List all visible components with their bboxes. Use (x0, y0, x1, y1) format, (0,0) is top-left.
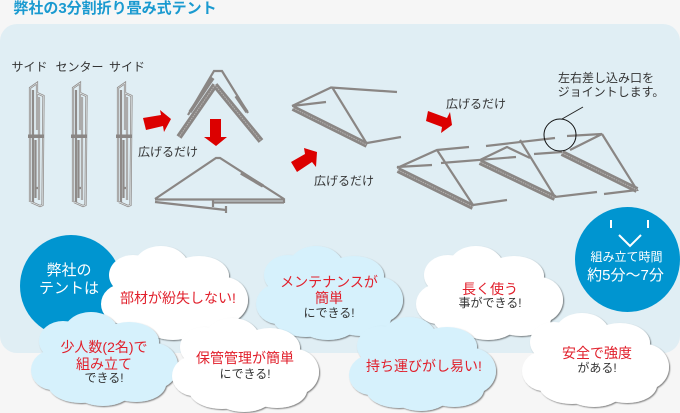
tent stage: fully open (397, 134, 637, 207)
label: spread 3: 広げるだけ (446, 97, 506, 111)
title: 弊社の3分割折り畳み式テント (13, 0, 217, 17)
folded tent: side (28, 83, 44, 206)
labels: side center side: サイド (11, 60, 48, 74)
cloud: long use (416, 246, 563, 340)
folded tent: side 2 (116, 83, 132, 206)
cloud: easy maintenance: メンテナンスが (280, 274, 378, 290)
circle: our tent (20, 235, 122, 337)
cloud: no lost parts (101, 246, 248, 340)
cloud: long use: 事ができる! (458, 295, 522, 310)
circle: time: 組み立て時間 (590, 250, 663, 264)
cloud: easy transport (349, 317, 496, 411)
circle: our tent: 弊社の (46, 262, 92, 279)
cloud: easy maintenance: にできる! (303, 306, 355, 320)
cloud: safe and strong: 安全で強度 (562, 345, 632, 361)
cloud: easy storage: 保管管理が簡単 (196, 350, 294, 366)
label: spread 2: 広げるだけ (314, 174, 374, 188)
arrow 1 (143, 110, 171, 132)
arrow 3 (291, 148, 317, 172)
panel: background (0, 24, 680, 353)
cloud: few people: 少人数(2名)で (60, 339, 148, 355)
circle: time (575, 207, 680, 312)
cloud: easy transport: 持ち運びがし易い! (366, 358, 482, 374)
arrow down (204, 119, 227, 146)
tent stage: opening (292, 87, 401, 145)
tent stage: flat triangle (155, 158, 284, 213)
cloud: easy maintenance: 簡単 (315, 290, 343, 306)
icon: clock hands (611, 220, 648, 246)
cloud: few people: 組み立て (76, 356, 132, 372)
circle: time: 約5分〜7分 (587, 267, 664, 284)
labels: side center side: サイド (109, 60, 145, 74)
tent stage: half open (179, 71, 261, 141)
arrow 4 (426, 111, 452, 133)
callout: joint (544, 70, 664, 151)
cloud: easy storage: にできる! (219, 367, 271, 381)
cloud: safe and strong (522, 313, 669, 407)
cloud: long use: 長く使う (462, 281, 518, 297)
cloud: easy storage (172, 318, 319, 412)
labels: side center side: センター (55, 60, 104, 74)
cloud: no lost parts: 部材が紛失しない! (120, 290, 236, 306)
labels: side center side (11, 60, 145, 74)
cloud: safe and strong: がある! (577, 360, 617, 375)
callout: joint: 左右差し込み口を (558, 70, 654, 85)
label: spread 1: 広げるだけ (138, 145, 198, 159)
callout: joint: ジョイントします。 (558, 85, 664, 99)
circle: our tent: テントは (39, 280, 99, 297)
cloud: easy maintenance (256, 246, 403, 340)
folded tent: center (71, 83, 87, 206)
cloud: few people (31, 312, 178, 406)
cloud: few people: できる! (84, 371, 124, 385)
